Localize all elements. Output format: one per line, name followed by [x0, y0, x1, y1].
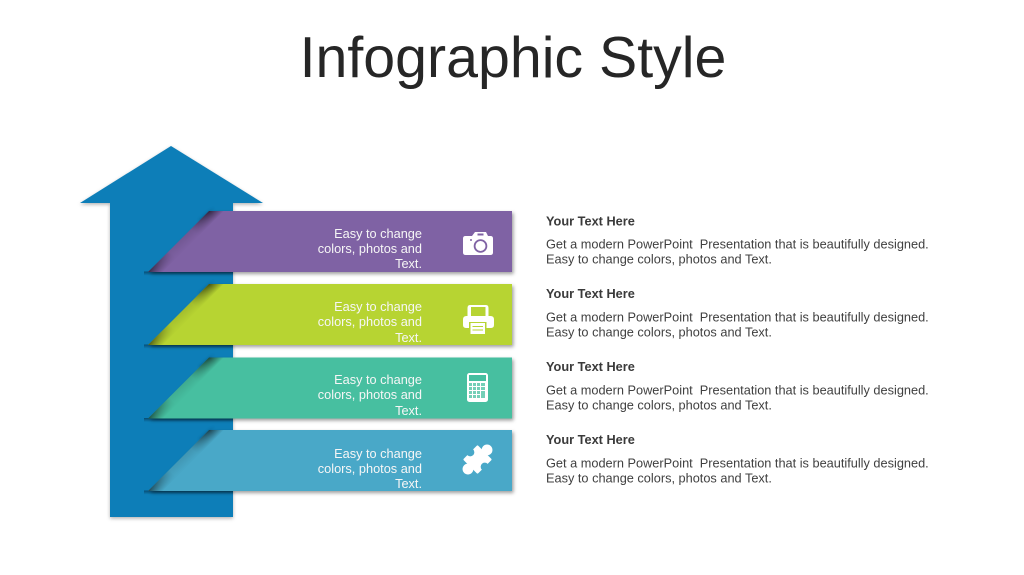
panel: green band [144, 281, 512, 348]
text block: item 1: Your Text Here [546, 214, 635, 228]
text block: item 3: Your Text Here [546, 359, 635, 374]
text: teal band label: Text. [395, 403, 422, 418]
text block: item 3: Get a modern PowerPoint Presentation that is beautifully designed. [546, 382, 929, 398]
text: purple band label: Easy to change [334, 226, 422, 241]
text block: item 1: Get a modern PowerPoint Presentation that is beautifully designed. [546, 236, 929, 252]
text block: item 3 [546, 359, 929, 412]
text: green band label: Text. [395, 330, 422, 345]
text block: item 4: Your Text Here [546, 432, 635, 447]
text block: item 2: Your Text Here [546, 286, 635, 301]
icon: puzzle piece [454, 436, 501, 483]
icon: calculator [467, 373, 488, 402]
text: teal band label: colors, photos and [318, 387, 422, 402]
text block: item 2 [546, 286, 929, 340]
text block: item 3: Easy to change colors, photos and Text. [546, 398, 772, 412]
text: teal band label: Easy to change [334, 372, 422, 387]
text block: item 2: Get a modern PowerPoint Presentation that is beautifully designed. [546, 310, 929, 324]
text: purple band label: colors, photos and [318, 241, 422, 256]
icon: camera [463, 232, 493, 255]
text: green band label: colors, photos and [318, 314, 422, 329]
text: blue band label: Easy to change [334, 446, 422, 461]
panel: blue band [144, 427, 512, 494]
text block: item 1: Easy to change colors, photos and Text. [546, 252, 772, 266]
panel: teal band [144, 354, 512, 422]
text: green band label: Easy to change [334, 299, 422, 314]
title: Infographic Style [300, 26, 726, 90]
arrow [80, 146, 263, 517]
panel: purple band [144, 208, 512, 276]
text: blue band label: colors, photos and [318, 461, 422, 476]
text block: item 4: Easy to change colors, photos and Text. [546, 470, 772, 486]
text block: item 4: Get a modern PowerPoint Presentation that is beautifully designed. [546, 456, 929, 470]
text block: item 2: Easy to change colors, photos and Text. [546, 324, 772, 340]
text block: item 1 [546, 214, 929, 266]
icon: printer [463, 305, 494, 335]
text: purple band label: Text. [395, 256, 422, 271]
text block: item 4 [546, 432, 929, 486]
text: blue band label: Text. [395, 476, 422, 491]
